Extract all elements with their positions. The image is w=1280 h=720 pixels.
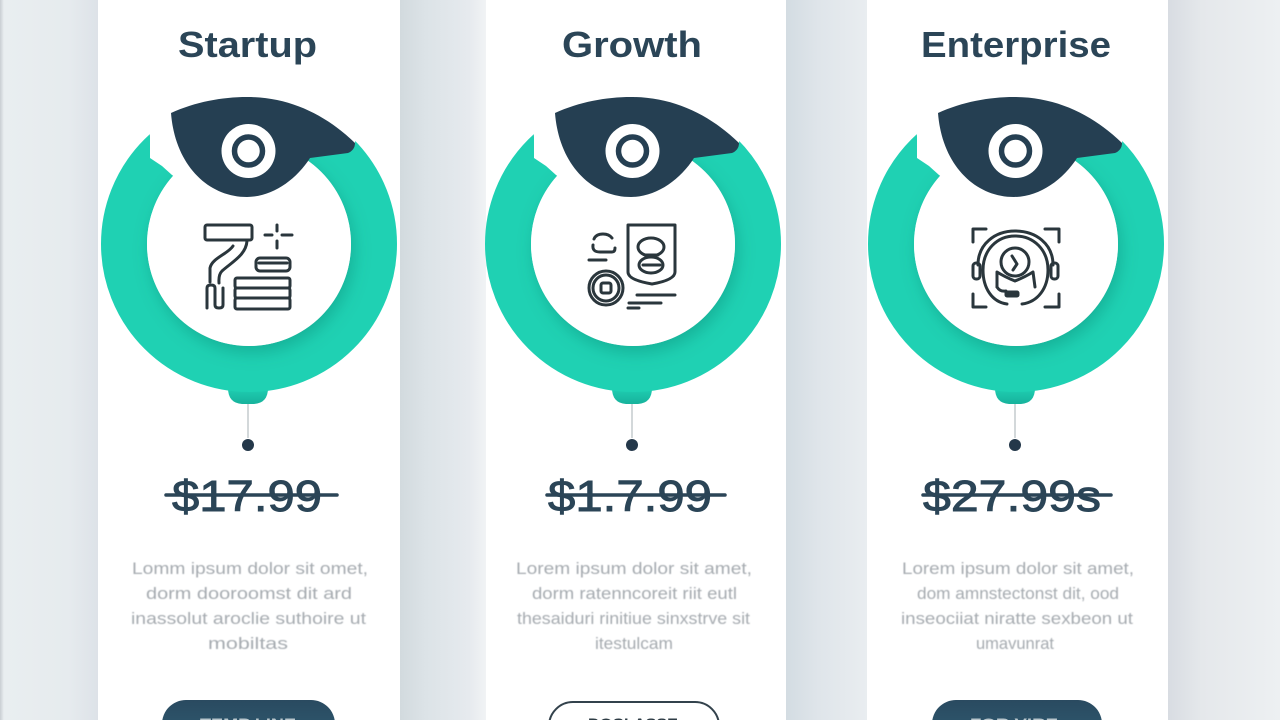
description — [901, 559, 1134, 653]
description: dom amnstectonst dit, ood — [917, 584, 1119, 603]
description: Lorem ipsum dolor sit amet, — [902, 559, 1134, 578]
description: dorm dooroomst dit ard — [146, 584, 352, 603]
card background — [98, 0, 400, 720]
description: mobiltas — [208, 634, 288, 653]
icon: headset avatar — [973, 229, 1059, 307]
description: itestulcam — [595, 634, 673, 653]
button — [549, 702, 719, 720]
connector with dot — [1009, 404, 1021, 451]
card background — [867, 0, 1168, 720]
heading: Startup: Startup — [178, 24, 317, 65]
description: umavunrat — [976, 634, 1054, 653]
connector with dot — [626, 404, 638, 451]
description — [131, 559, 368, 653]
description: Lorem ipsum dolor sit amet, — [516, 559, 752, 578]
panel: Growth plan — [486, 0, 786, 720]
donut badge — [508, 80, 758, 404]
description: dorm ratenncoreit riit eutl — [532, 584, 737, 603]
button — [932, 700, 1102, 720]
button — [162, 700, 335, 720]
icon: document and coin — [589, 225, 675, 308]
heading: Growth: Growth — [562, 24, 702, 65]
connector with dot — [242, 404, 254, 451]
card background — [486, 0, 786, 720]
price: $1.7.99 — [548, 472, 712, 521]
description: inassolut aroclie suthoire ut — [131, 609, 366, 628]
description: inseociiat niratte sexbeon ut — [901, 609, 1133, 628]
donut badge — [124, 80, 374, 404]
description: thesaiduri rinitiue sinxstrve sit — [517, 609, 750, 628]
donut badge — [891, 80, 1141, 404]
description: Lomm ipsum dolor sit omet, — [132, 559, 368, 578]
panel: Enterprise plan — [867, 0, 1168, 720]
icon: paint roller and stack — [205, 225, 292, 309]
price: $27.99s — [923, 472, 1101, 521]
description — [516, 559, 752, 653]
panel: Startup plan — [98, 0, 400, 720]
price: $17.99 — [172, 472, 322, 521]
heading: Enterprise: Enterprise — [921, 24, 1111, 65]
